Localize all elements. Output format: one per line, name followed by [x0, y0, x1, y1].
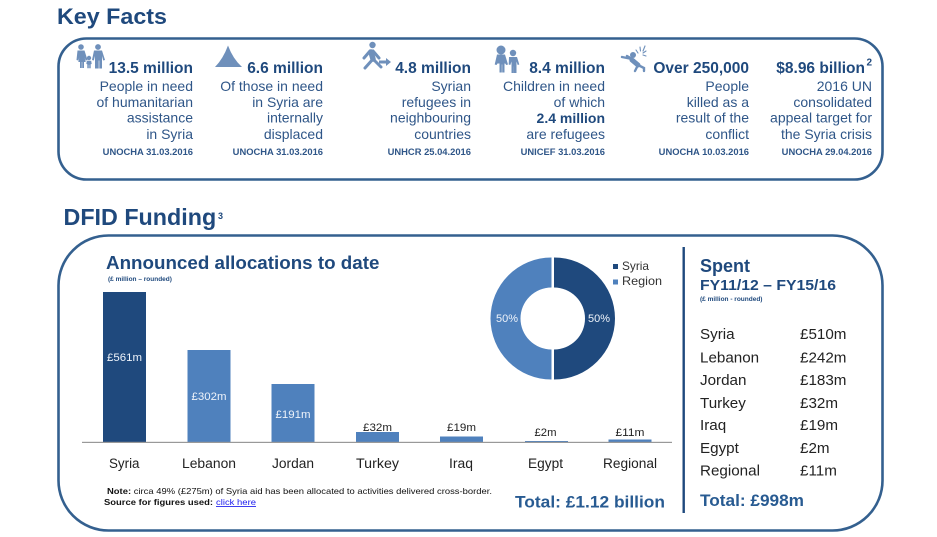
stat: people killed: Over 250,000: [653, 60, 749, 77]
table: spent by country: £183m: [800, 372, 846, 389]
stat: children: are refugees: [526, 126, 605, 142]
bar chart: allocations by country: Lebanon: [182, 456, 236, 471]
heading: DFID Funding: 3: [218, 211, 223, 221]
heading: spent: FY11/12 – FY15/16: [700, 278, 836, 294]
bar chart: allocations by country: Regional: [603, 456, 657, 471]
stat: UN appeal target: $8.96 billion: [776, 60, 865, 77]
bar chart: allocations by country: £191m: [276, 409, 310, 421]
total spent: Total: £998m: [700, 491, 804, 510]
bar chart: allocations by country: £32m: [363, 422, 392, 434]
stat: people in need: assistance: [127, 110, 193, 126]
heading: announced allocations: (£ million – rounded): [108, 276, 172, 283]
bar chart: allocations by country: Syria: [109, 456, 140, 471]
heading: DFID Funding: DFID Funding: [64, 204, 216, 230]
icon: children: [495, 46, 519, 73]
bar chart: allocations by country: £561m: [107, 352, 142, 364]
legend: Region: [622, 274, 662, 288]
stat: refugees: 4.8 million: [395, 60, 471, 77]
icon: walking refugee with arrow: [364, 42, 391, 68]
note and source: click here: [216, 497, 256, 507]
note and source: [104, 486, 492, 507]
donut chart: Syria vs region: 50%: [496, 313, 518, 325]
stat: UN appeal target: consolidated: [793, 94, 872, 110]
heading: announced allocations: [106, 252, 379, 283]
panel: DFID funding: [58, 236, 882, 530]
table: spent by country: Regional: [700, 462, 760, 480]
bar chart: allocations by country: £11m: [616, 427, 644, 439]
stat: refugees: Syrian: [431, 78, 471, 94]
panel: key facts: [58, 38, 882, 180]
stat: people killed: result of the: [676, 110, 749, 126]
stat: UN appeal target: the Syria crisis: [781, 126, 872, 142]
stat: people killed: People: [705, 78, 749, 94]
table: spent by country: Egypt: [700, 440, 740, 457]
total allocations: Total: £1.12 billion: [515, 492, 665, 512]
table: spent by country: £2m: [800, 440, 830, 457]
note and source: Source for figures used:: [104, 497, 213, 507]
stat: people in need: [96, 60, 193, 157]
table: spent by country: Iraq: [700, 417, 726, 434]
table: spent by country: Syria: [700, 326, 735, 343]
donut chart: Syria vs region: 50%: [588, 313, 610, 325]
stat: people in need: People in need: [100, 78, 193, 94]
stat: internally displaced: internally: [267, 110, 323, 126]
stat: children: UNICEF 31.03.2016: [521, 146, 605, 157]
stat: people in need: 13.5 million: [109, 60, 193, 77]
heading: spent: Spent: [700, 256, 750, 276]
bar chart: allocations by country: £2m: [534, 427, 556, 439]
stat: UN appeal target: appeal target for: [770, 110, 872, 126]
bar chart: allocations by country: Egypt: [528, 456, 563, 471]
donut chart: Syria vs region: [490, 258, 615, 380]
table: spent by country: £510m: [800, 326, 846, 343]
stat: people in need: UNOCHA 31.03.2016: [103, 146, 193, 157]
icon: injured person: [622, 46, 646, 71]
stat: children: Children in need: [503, 78, 605, 94]
heading: spent: [700, 256, 836, 303]
stat: internally displaced: UNOCHA 31.03.2016: [233, 146, 323, 157]
table: spent by country: £11m: [800, 462, 837, 480]
table: spent by country: Jordan: [700, 372, 746, 389]
heading: announced allocations: Announced allocations to date: [106, 252, 379, 273]
stat: refugees: neighbouring: [390, 110, 471, 126]
stat: refugees: countries: [414, 126, 471, 142]
bar chart: allocations by country: Iraq: [449, 456, 473, 471]
heading: spent: (£ million - rounded): [700, 296, 762, 303]
bar chart: allocations by country: £302m: [192, 391, 226, 403]
stat: refugees: [388, 60, 471, 157]
stat: people in need: of humanitarian: [96, 94, 193, 110]
table: spent by country: [700, 326, 846, 480]
heading: Key Facts: Key Facts: [57, 4, 167, 29]
stat: internally displaced: 6.6 million: [247, 60, 323, 77]
legend: Syria: [622, 259, 649, 273]
stat: people killed: killed as a: [687, 94, 749, 110]
stat: UN appeal target: 2: [866, 58, 872, 68]
bar chart: allocations by country: £19m: [447, 422, 476, 434]
stat: UN appeal target: UNOCHA 29.04.2016: [782, 146, 872, 157]
bar chart: allocations by country: Turkey: [356, 456, 399, 471]
stat: internally displaced: Of those in need: [220, 78, 323, 94]
icon: family: [76, 44, 105, 68]
table: spent by country: £19m: [800, 417, 838, 434]
stat: internally displaced: [220, 60, 323, 157]
bar chart: allocations by country: Jordan: [272, 456, 314, 471]
legend: [613, 259, 662, 288]
table: spent by country: Turkey: [700, 395, 746, 412]
stat: refugees: refugees in: [402, 94, 471, 110]
icon: tent: [215, 46, 242, 67]
table: spent by country: £32m: [800, 395, 838, 412]
stat: people killed: UNOCHA 10.03.2016: [659, 146, 749, 157]
stat: UN appeal target: [770, 58, 872, 157]
stat: children: 8.4 million: [529, 60, 605, 77]
stat: UN appeal target: 2016 UN: [817, 78, 872, 94]
stat: internally displaced: displaced: [264, 126, 323, 142]
table: spent by country: Lebanon: [700, 350, 759, 366]
note and source: Note: circa 49% (£275m) of Syria aid has been allocated to activities delivered cross-border.: [107, 486, 492, 496]
stat: refugees: UNHCR 25.04.2016: [388, 146, 471, 157]
stat: people in need: in Syria: [146, 126, 193, 142]
stat: children: [503, 60, 605, 157]
bar chart: allocations by country: [82, 292, 672, 471]
table: spent by country: £242m: [800, 350, 846, 366]
stat: children: of which: [554, 94, 605, 110]
stat: people killed: [653, 60, 749, 157]
stat: internally displaced: in Syria are: [252, 94, 323, 110]
stat: children: 2.4 million: [537, 110, 605, 126]
divider: [682, 247, 685, 513]
stat: people killed: conflict: [705, 126, 749, 142]
